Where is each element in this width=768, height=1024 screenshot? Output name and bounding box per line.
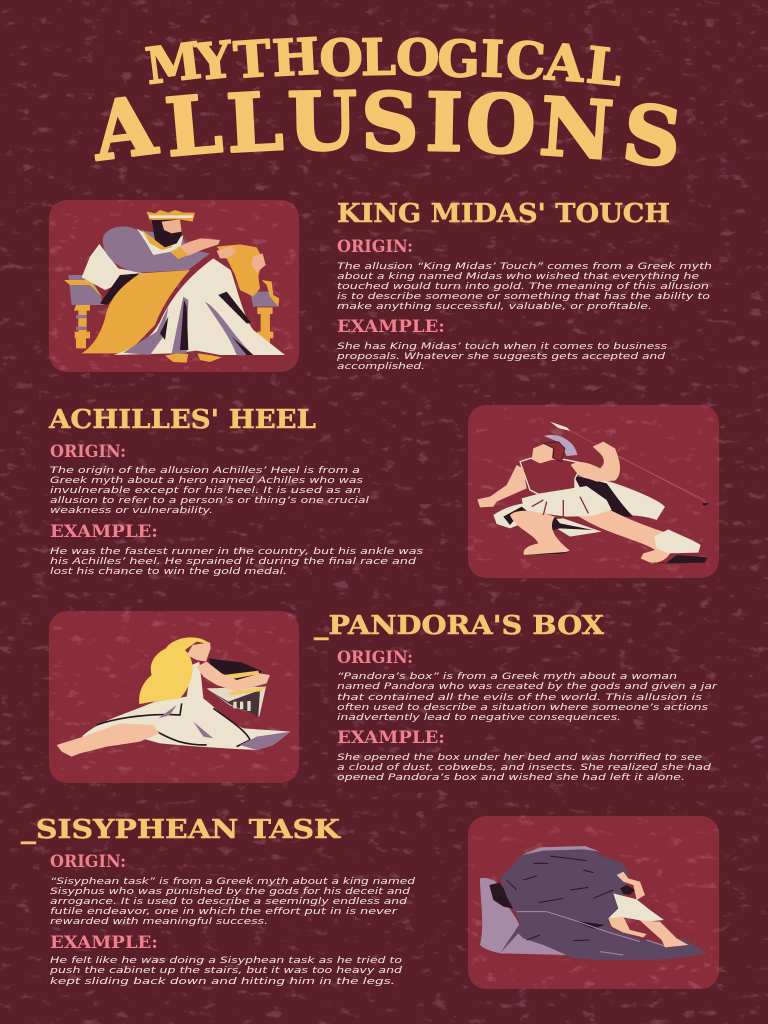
example text: She has King Midas’ touch when it comes to business <box>337 342 668 352</box>
example label: EXAMPLE: <box>50 933 158 953</box>
example text: kept sliding back down and hitting him in the legs. <box>50 977 395 987</box>
section: King Midas text <box>336 199 713 372</box>
origin text: make anything successful, valuable, or profitable. <box>337 302 652 312</box>
origin label: ORIGIN: <box>337 648 413 668</box>
example text: a cloud of dust, cobwebs, and insects. She realized she had <box>337 763 712 773</box>
origin text <box>50 466 370 516</box>
card: Pandora <box>49 611 299 783</box>
origin text: touched would turn into gold. The meaning of this allusion <box>337 282 710 292</box>
title line 2: ALLUSIONS <box>87 74 686 186</box>
origin text <box>337 262 713 312</box>
illustration: King Midas and daughter <box>64 210 285 363</box>
origin text: often used to describe a situation where someone’s actions <box>337 703 709 713</box>
origin text: “Pandora’s box” is from a Greek myth about a woman <box>337 672 678 682</box>
heading: KING MIDAS' TOUCH <box>337 199 670 229</box>
origin text: that contained all the evils of the world. This allusion is <box>337 693 703 703</box>
illustration: Sisyphus <box>480 846 707 960</box>
origin text: inadvertently lead to negative consequences. <box>337 713 621 723</box>
example text: She opened the box under her bed and was horrified to see <box>337 753 703 763</box>
origin text: rewarded with meaningful success. <box>50 917 268 927</box>
example text: lost his chance to win the gold medal. <box>50 567 287 577</box>
example text: He was the fastest runner in the country, but his ankle was <box>50 547 424 557</box>
example text <box>50 547 424 577</box>
origin label: ORIGIN: <box>337 237 413 257</box>
illustration: Pandora <box>57 637 291 757</box>
example text: his Achilles’ heel. He sprained it during the final race and <box>50 557 417 567</box>
title <box>87 27 686 186</box>
example text: opened Pandora’s box and wished she had left it alone. <box>337 773 685 783</box>
origin text: is to describe someone or something that has the ability to <box>337 292 711 302</box>
origin text: weakness or vulnerability. <box>50 506 213 516</box>
example text: He felt like he was doing a Sisyphean task as he tried to <box>50 956 403 966</box>
section: Achilles text <box>48 405 424 577</box>
example text: proposals. Whatever she suggests gets accepted and <box>336 352 665 362</box>
card: Achilles <box>468 405 719 578</box>
origin text: “Sisyphean task” is from a Greek myth about a king named <box>50 877 415 887</box>
origin text: arrogance. It is used to describe a seemingly endless and <box>50 897 407 907</box>
origin text <box>337 672 719 723</box>
example label: EXAMPLE: <box>337 317 445 337</box>
section: Sisyphean text <box>21 815 415 987</box>
origin text: Greek myth about a hero named Achilles who was <box>50 476 364 486</box>
origin text: The allusion “King Midas’ Touch” comes from a Greek myth <box>337 262 713 272</box>
origin label: ORIGIN: <box>50 852 126 872</box>
origin text: Sisyphus who was punished by the gods for his deceit and <box>50 887 410 897</box>
title line 1: MYTHOLOGICAL <box>142 27 625 98</box>
origin text <box>50 877 415 927</box>
heading: _SISYPHEAN TASK <box>21 815 342 845</box>
card: Sisyphus <box>468 816 719 989</box>
example text <box>49 956 403 987</box>
origin text: The origin of the allusion Achilles’ Heel is from a <box>50 466 360 476</box>
origin text: invulnerable except for his heel. It is used as an <box>50 486 362 496</box>
section: Pandora text <box>314 611 719 783</box>
heading: _PANDORA'S BOX <box>314 611 605 641</box>
card: King Midas <box>49 200 299 372</box>
example text: accomplished. <box>337 362 425 372</box>
heading: ACHILLES' HEEL <box>48 405 316 435</box>
example text <box>337 753 712 783</box>
origin text: about a king named Midas who wished that everything he <box>337 272 700 282</box>
example text: push the cabinet up the stairs, but it was too heavy and <box>49 966 402 976</box>
origin text: named Pandora who was created by the gods and given a jar <box>337 682 719 692</box>
origin label: ORIGIN: <box>50 442 126 462</box>
example text <box>336 342 668 372</box>
origin text: futile endeavor, one in which the effort put in is never <box>50 907 399 917</box>
example label: EXAMPLE: <box>337 728 445 748</box>
example label: EXAMPLE: <box>50 522 158 542</box>
origin text: allusion to refer to a person’s or thing’s one crucial <box>50 496 370 506</box>
illustration: Achilles <box>477 422 709 563</box>
